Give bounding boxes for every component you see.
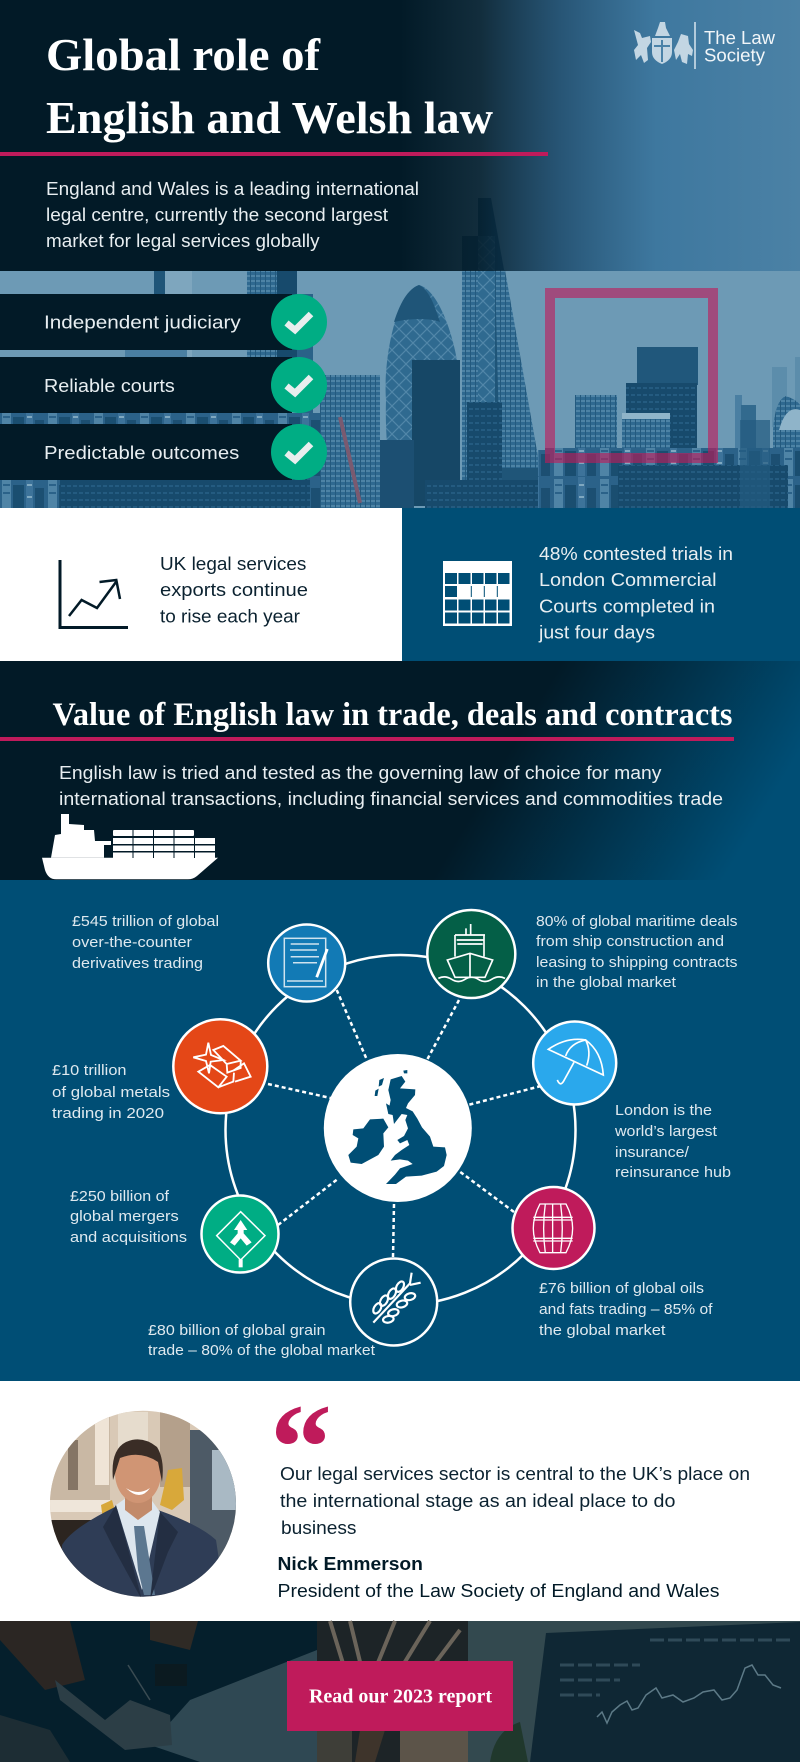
caption: oils and fats: and fats trading – 85% of [539,1301,713,1318]
node: maritime [427,910,515,998]
title: English and Welsh law [46,92,493,143]
caption: derivatives: £545 trillion of global [72,913,219,930]
intro text: market for legal services globally [46,231,320,251]
quote mark: “ [270,1379,332,1516]
quote text: business [281,1518,356,1538]
crest [634,22,693,64]
trials text: London Commercial [539,570,716,590]
panel: trials [402,508,800,661]
caption: insurance: London is the [615,1102,712,1119]
checklist: Independent judiciary: Independent judiciary [44,313,241,333]
quote text: the international stage as an ideal place to do [280,1491,675,1511]
caption: mergers: and acquisitions [70,1229,187,1246]
checklist: Predictable outcomes: Predictable outcomes [44,443,239,463]
trials text [538,544,733,643]
caption: maritime: leasing to shipping contracts [536,954,738,971]
node: mergers [202,1196,278,1272]
dashed connectors [268,990,541,1257]
intro text: legal centre, currently the second largest [46,205,388,225]
caption: derivatives: over-the-counter [72,934,192,951]
exports text: exports continue [160,580,308,600]
trials text: just four days [538,623,655,643]
node: derivatives [268,924,345,1002]
trials text: Courts completed in [539,597,715,617]
caption: oils and fats [539,1280,713,1339]
node: metals [173,1019,267,1113]
portrait photo [50,1410,236,1600]
caption: grain: trade – 80% of the global market [148,1342,376,1359]
caption: grain [148,1322,376,1359]
panel: quote [50,1406,749,1601]
icon: calendar [443,561,512,626]
caption: maritime: 80% of global maritime deals [536,913,738,930]
caption: metals: of global metals [52,1084,170,1101]
skyline: Leadenhall wedge tower [462,198,545,508]
skyline: buildings behind list [0,240,320,508]
title [46,29,493,143]
logo: The Law Society [634,22,776,69]
caption: mergers [70,1188,187,1246]
hub: UK and Ireland map [324,1054,472,1202]
trials text: 48% contested trials in [539,544,733,564]
icon: cargo ship [42,814,218,879]
checklist: Predictable outcomes [0,424,327,480]
caption: insurance: insurance/ [615,1144,690,1161]
checklist: Independent judiciary [0,294,327,350]
section heading: Value of English law in trade, deals and contracts [52,697,733,733]
panel: hero city skyline [0,0,800,508]
section intro: English law is tried and tested as the governing law of choice for many [59,763,662,783]
logo: The Law Society: The Law [704,28,776,48]
caption: metals: £10 trillion [52,1062,127,1079]
checklist: Reliable courts [0,357,327,413]
caption: maritime: in the global market [536,974,677,991]
panel: global hub diagram [0,880,800,1381]
quote text [280,1464,750,1538]
skyline: foreground blocks [320,360,578,508]
caption: maritime: from ship construction and [536,933,724,950]
node: oils and fats [512,1187,594,1269]
footer photo: desk and hand [0,1621,317,1762]
icon: rising line chart [60,560,128,628]
exports text: UK legal services [160,554,306,574]
title underline [0,152,548,156]
exports text [160,554,308,627]
panel: footer photo [0,1621,800,1762]
attribution: Nick Emmerson [278,1554,423,1574]
exports text: to rise each year [160,607,300,627]
checklist: Reliable courts: Reliable courts [44,376,175,396]
logo: The Law Society: Society [704,46,765,66]
caption: oils and fats: the global market [539,1322,666,1339]
orbit ring [226,955,576,1305]
attribution [278,1554,720,1601]
intro text [46,179,419,251]
section intro [59,763,723,809]
caption: insurance: world’s largest [614,1123,718,1140]
caption: insurance [614,1102,731,1181]
caption: derivatives [72,913,219,972]
footer photo: trading screen [468,1621,800,1762]
skyline: City towers on right [545,347,800,508]
dark gradient header overlay [0,0,800,271]
quote text: Our legal services sector is central to the UK’s place on [280,1464,750,1484]
caption: mergers: global mergers [70,1208,179,1225]
footer photo: centre panel [317,1621,468,1762]
caption: insurance: reinsurance hub [615,1164,731,1181]
skyline: Gherkin [386,285,460,505]
intro text: England and Wales is a leading international [46,179,419,199]
pink outline square [545,288,718,463]
attribution: President of the Law Society of England and Wales [278,1581,720,1601]
node: grain [350,1258,437,1346]
node: insurance [533,1022,616,1104]
caption: mergers: £250 billion of [70,1188,170,1205]
button: Read our 2023 report [309,1686,492,1708]
caption: oils and fats: £76 billion of global oils [539,1280,704,1297]
section intro: international transactions, including financial services and commodities trade [59,789,723,809]
panel: exports [0,508,402,661]
button [287,1661,513,1731]
caption: metals [52,1062,170,1122]
panel: value of English law [0,661,800,880]
caption: grain: £80 billion of global grain [148,1322,326,1339]
caption: metals: trading in 2020 [52,1105,164,1122]
caption: maritime [536,913,738,991]
caption: derivatives: derivatives trading [72,955,203,972]
title: Global role of [46,29,321,80]
